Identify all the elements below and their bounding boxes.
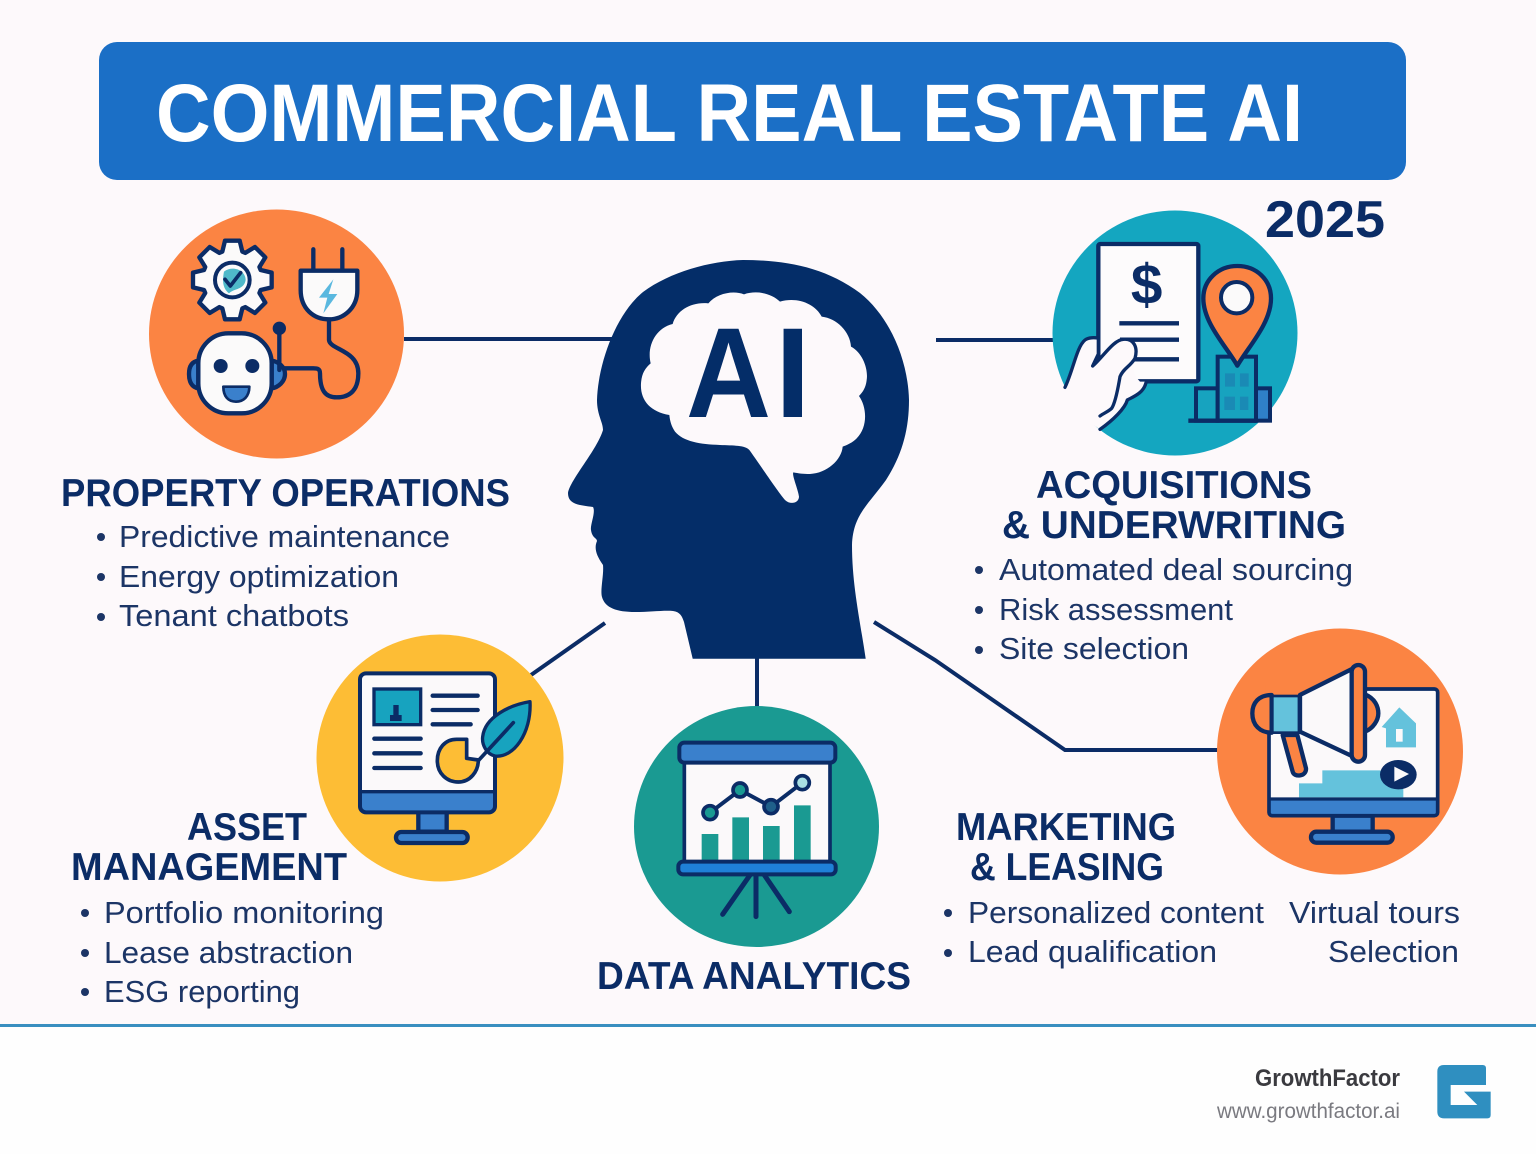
connector lines xyxy=(404,339,1218,750)
heading: PROPERTY OPERATIONS xyxy=(61,472,510,515)
bullet list: Lease abstraction xyxy=(104,935,353,970)
footer brand xyxy=(1216,1065,1491,1123)
icon: document, hand, pin, building: $ xyxy=(1131,254,1162,317)
icon: logo xyxy=(1437,1065,1491,1118)
bullet list: Tenant chatbots xyxy=(119,598,349,633)
icon: monitor with document and leaf xyxy=(360,673,530,843)
central head with AI brain xyxy=(568,260,909,659)
panel: property operations xyxy=(61,210,510,633)
teal circle xyxy=(1052,210,1298,456)
heading xyxy=(71,806,347,889)
bullet list xyxy=(81,895,384,1009)
heading: & UNDERWRITING xyxy=(1002,504,1346,547)
brand name: GrowthFactor xyxy=(1255,1065,1400,1092)
heading: MARKETING xyxy=(956,806,1176,849)
icon: document, hand, pin, building xyxy=(1065,244,1271,429)
icon: presentation board chart xyxy=(678,743,836,917)
panel: data analytics xyxy=(597,706,911,998)
bullet list: ESG reporting xyxy=(104,974,300,1009)
bullet list xyxy=(944,895,1460,969)
bullet list: Personalized content xyxy=(968,895,1264,930)
bullet list: Site selection xyxy=(999,631,1189,666)
bullet list: Selection xyxy=(1328,934,1459,969)
icons: gear, plug, robot xyxy=(189,241,358,413)
orange circle xyxy=(149,210,404,458)
heading: & LEASING xyxy=(970,846,1164,889)
panel: acquisitions and underwriting xyxy=(975,210,1353,666)
bullet list xyxy=(975,552,1353,666)
AI letters: A xyxy=(686,302,771,445)
AI letters: I xyxy=(775,302,811,445)
heading: DATA ANALYTICS xyxy=(597,955,911,998)
panel: asset management xyxy=(71,634,564,1009)
orange circle xyxy=(1217,628,1463,874)
bullet list: Virtual tours xyxy=(1289,895,1460,930)
yellow circle xyxy=(316,634,564,882)
bullet list xyxy=(97,519,450,633)
bullet list: Lead qualification xyxy=(968,934,1217,969)
bullet list: Automated deal sourcing xyxy=(999,552,1353,587)
green circle xyxy=(634,706,879,947)
title banner xyxy=(99,42,1406,180)
panel: marketing and leasing xyxy=(944,628,1463,969)
bullet list: Energy optimization xyxy=(119,559,399,594)
bullet list: Portfolio monitoring xyxy=(104,895,384,930)
title banner: COMMERCIAL REAL ESTATE AI xyxy=(156,68,1303,159)
bullet list: Risk assessment xyxy=(999,592,1233,627)
heading: ACQUISITIONS xyxy=(1036,464,1312,507)
heading xyxy=(956,806,1176,889)
bullet list: Predictive maintenance xyxy=(119,519,450,554)
icon: megaphone and monitor xyxy=(1252,665,1438,843)
year label: 2025 xyxy=(1265,191,1385,249)
website: www.growthfactor.ai xyxy=(1216,1100,1400,1123)
heading: ASSET xyxy=(187,806,307,849)
heading xyxy=(1002,464,1346,547)
brain xyxy=(641,292,867,503)
heading: MANAGEMENT xyxy=(71,846,347,889)
